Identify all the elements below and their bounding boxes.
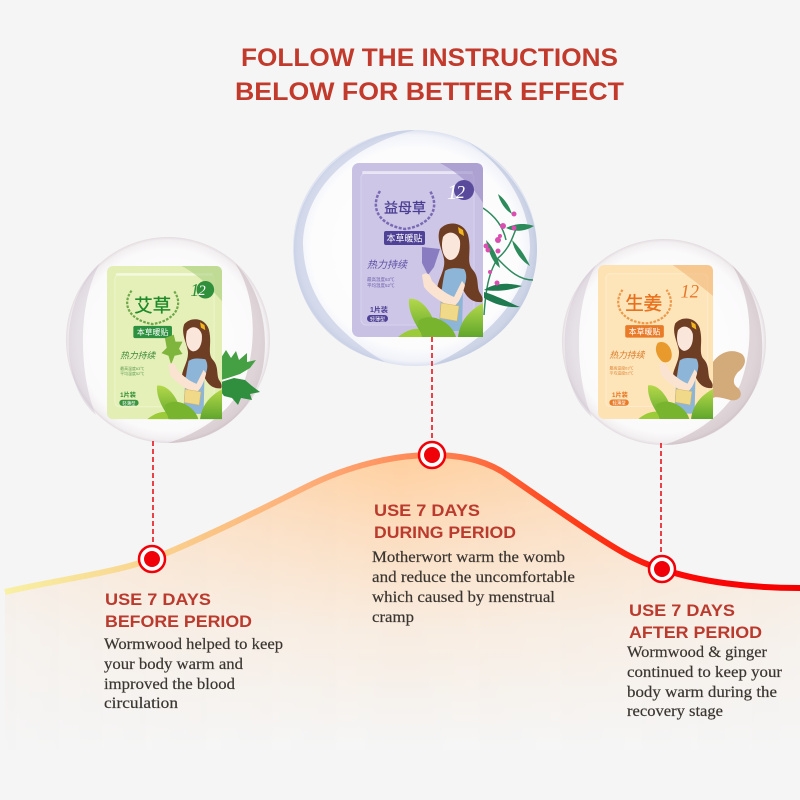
product pack: wormwood: 热力持续 [120,350,156,360]
description: after period: Wormwood & ginger [627,644,768,661]
heading: before period: BEFORE PERIOD [105,612,252,631]
product pack: ginger: 1片装 [612,391,628,399]
heading: after period: USE 7 DAYS [629,601,735,620]
description: during period: cramp [372,609,414,626]
product pack: wormwood: 艾草 [134,295,171,316]
panel: left bubble with wormwood pack [66,237,270,443]
heading: before period [105,590,252,631]
heading: after period: AFTER PERIOD [629,623,762,642]
product pack: ginger: 最高温度63℃ [609,365,634,370]
herb in hand [161,335,183,365]
heading: during period: DURING PERIOD [374,523,516,542]
bubble glass [293,130,537,366]
product pack: ginger: 12 [681,283,699,303]
description: before period: your body warm and [104,656,243,673]
herb: ginger root [713,351,745,400]
product pack: motherwort: 轻薄型 [370,316,385,323]
product pack: motherwort: 热力持续 [367,259,408,271]
product pack: wormwood: 1 [190,280,199,300]
bubble glass [562,239,766,445]
description: before period: Wormwood helped to keep [104,636,283,653]
product pack: ginger: 本草暖贴 [629,326,660,336]
heading: before period: USE 7 DAYS [105,590,211,609]
product pack: motherwort: 1片装 [370,305,388,314]
text block: during period [372,501,575,626]
product pack: motherwort: 最高温度63℃ [367,276,395,283]
product pack: motherwort: 1 [447,180,458,204]
marker: during period [419,442,445,468]
description: during period: and reduce the uncomfortable [372,569,575,586]
heading: during period [374,501,516,542]
product pack: wormwood: 1片装 [120,391,136,399]
description: during period: which caused by menstrual [372,589,556,606]
product pack: motherwort: 本草暖贴 [386,232,423,244]
herb in hand [656,342,672,362]
product pack: ginger: 热力持续 [609,350,646,360]
description: before period: circulation [104,695,178,712]
description: after period: body warm during the [627,684,777,701]
product pack: wormwood: 本草暖贴 [137,327,169,337]
product pack: ginger [598,265,713,419]
description: after period: continued to keep your [627,664,783,681]
chart: warming curve line [5,455,800,592]
heading: during period: USE 7 DAYS [374,501,480,520]
title: FOLLOW THE INSTRUCTIONS [241,44,618,72]
product pack: motherwort: 平均温度52℃ [367,282,395,289]
product pack: motherwort: 2 [456,182,465,202]
product pack: ginger: 平均温度52℃ [609,371,634,376]
product pack: ginger: 轻薄型 [613,400,626,407]
connector: left dashed line [152,441,154,545]
herb in hand [422,247,440,275]
connector: centre dashed line [431,337,433,441]
product pack: wormwood: 2 [198,283,206,299]
text block: after period [627,601,783,720]
description: during period [372,549,575,626]
connector: right dashed line [660,443,662,555]
panel: centre bubble with motherwort pack [293,130,537,366]
heading: after period [629,601,762,642]
herb: motherwort stems [483,194,534,315]
description: after period [627,644,783,720]
description: before period [104,636,283,712]
text block: before period [104,590,283,712]
description: during period: Motherwort warm the womb [372,549,565,566]
product pack: motherwort: 益母草 [384,200,426,216]
title [235,44,624,106]
chart: area under curve [5,458,800,700]
product pack: wormwood: 最高温度63℃ [120,366,144,371]
product pack: ginger: 生姜 [625,293,662,314]
marker: before period [139,546,165,572]
bubble glass [66,237,270,443]
product pack: wormwood [107,266,222,419]
herb: wormwood leaves [221,350,260,405]
marker: after period [649,556,675,582]
title: BELOW FOR BETTER EFFECT [235,78,624,106]
product pack: motherwort [352,163,483,337]
panel: right bubble with ginger pack [562,239,766,445]
description: after period: recovery stage [627,703,723,720]
product pack: wormwood: 轻薄型 [122,400,136,407]
product pack: wormwood: 平均温度52℃ [120,371,144,376]
description: before period: improved the blood [104,676,235,693]
